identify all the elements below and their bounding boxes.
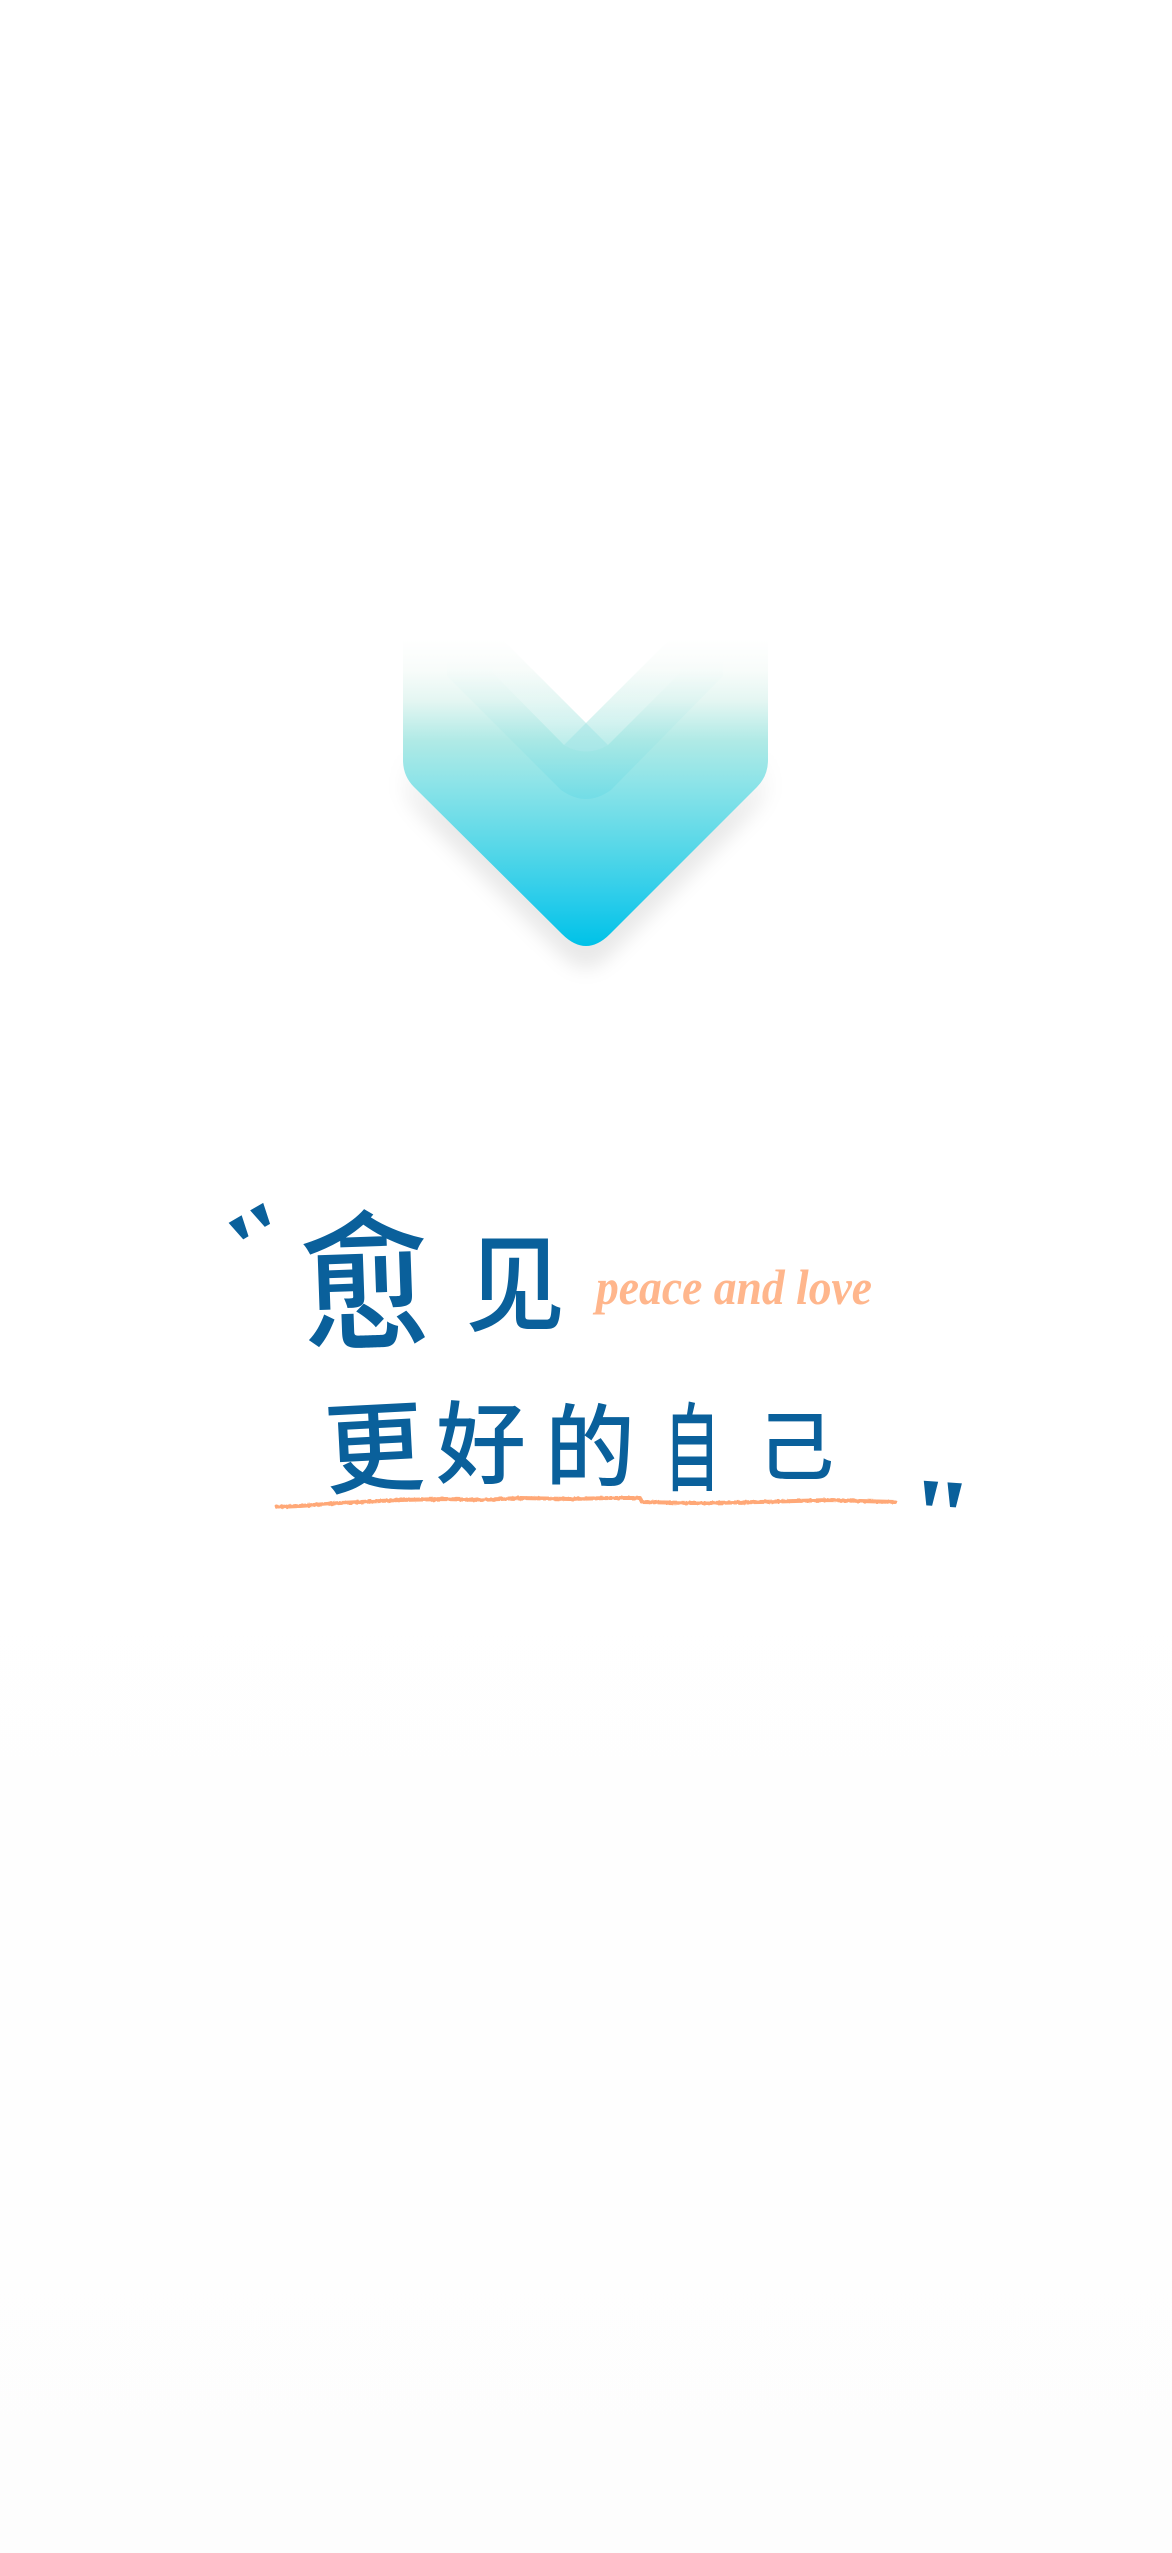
chevron drop shadow [403,662,768,968]
character: hao: 好 [436,1396,526,1496]
brush underline [277,1498,895,1507]
icon: gradient chevron heart [403,640,768,968]
opening quotation mark: " [207,1178,315,1300]
handwritten heading line two [321,1392,834,1509]
character: geng: 更 [321,1392,427,1509]
chevron body [403,640,768,946]
handwritten heading line one [298,1199,565,1371]
notch diamond [564,723,608,752]
character: zi: 自 [664,1396,720,1504]
character: jian: 见 [465,1227,565,1346]
character: ji: 己 [758,1406,834,1491]
closing quotation mark: " [905,1456,976,1575]
character: yu: 愈 [298,1199,433,1371]
inner chevron layer, light arms [493,660,680,752]
character: de: 的 [545,1399,635,1499]
tagline: peace and love: peace and love [592,1259,872,1315]
inner chevron layer, wide [447,650,723,799]
